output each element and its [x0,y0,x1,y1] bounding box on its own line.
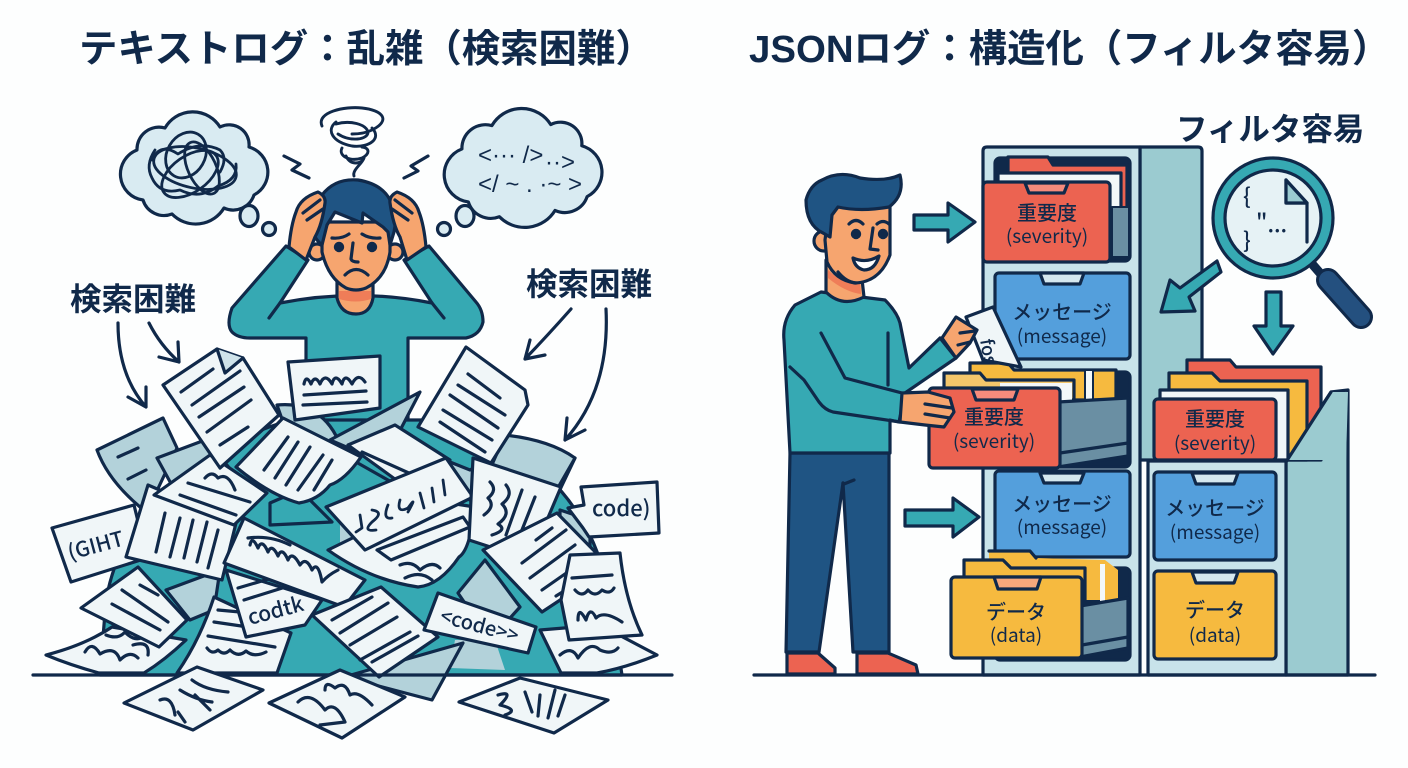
icon: magnifying glass with JSON: "... [1256,207,1287,239]
paper: scribble [154,455,267,525]
panel: text logs [33,28,672,738]
thought cloud: garbled code: ··> [545,149,575,176]
paper in hand: fos [974,337,1004,366]
paper: floor sheet A [124,667,263,730]
paper pile: codtk [244,588,307,632]
paper: wiggly columns [469,458,561,560]
filtered folder box: 重要度 [1185,408,1245,431]
paper: curled lines [236,418,361,503]
stressed person [229,180,483,440]
paper: vertical lines [126,485,236,580]
fourth drawer: message: メッセージ [1012,494,1112,516]
thought cloud: garbled code: <··· /> [478,142,543,169]
icon: magnifying glass with JSON: } [1243,223,1251,255]
arrow: diagonal to cabinet [1161,261,1221,312]
paper: lower right wiggly [561,553,642,640]
paper pile: <code>> [437,600,522,649]
fourth drawer: message: (message) [1017,513,1107,540]
filtered folder box: (severity) [1174,429,1256,456]
arrow: down to folder box [1254,292,1293,354]
paper: GIHT [52,505,147,582]
paper: code) [568,482,659,537]
second drawer: message [995,273,1130,359]
label: hard to search, left: 検索困難 [70,281,196,317]
open drawer with severity folder [929,363,1130,468]
ground line [754,673,1375,677]
panel: JSON logs [749,28,1390,675]
paper pile [33,347,672,738]
top drawer with severity folder [983,157,1130,262]
filtered folder box: (data) [1189,621,1241,648]
icon: stress zigzags [284,156,428,178]
ground line [33,673,672,677]
paper pile: (GIHT [64,523,127,567]
filtered folder box: データ [1185,598,1245,622]
neck [826,260,864,301]
paper: wiggly text, bottom left [46,627,186,673]
open drawer with severity folder: (severity) [953,427,1035,454]
paper: top right [418,347,528,463]
pants [786,453,889,652]
paper: wiggly line [224,518,365,607]
paper in hand [966,307,1021,367]
arrow: to lower drawer [905,498,979,537]
paper: ueeer [177,597,291,673]
open drawer: data: データ [986,600,1046,624]
happy person filing [784,174,1021,674]
top drawer with severity folder: 重要度 [1017,202,1077,225]
filtered folder box: (message) [1170,518,1260,545]
paper: center lines [312,587,438,677]
arrows pointing at the pile [118,309,606,440]
paper pile: code) [592,491,650,523]
open drawer with severity folder: 重要度 [964,406,1024,429]
sweater [784,292,956,453]
paper: left lines [81,567,187,647]
second drawer: message: (message) [1017,322,1107,349]
second drawer: message: メッセージ [1012,302,1112,324]
lower hand [900,392,954,427]
paper: floor sheet C [459,678,608,733]
arrow: to top drawer [914,203,975,242]
paper: bottom right wiggly [540,625,657,673]
paper: big top left [163,349,279,468]
label: easy to filter: フィルタ容易 [1176,111,1364,147]
icon: confusion spiral [321,108,383,176]
open drawer: data: (data) [990,621,1042,648]
thought cloud: tangled scribble [120,112,276,236]
filtered folder box [1148,360,1348,675]
paper: cursive [326,458,473,550]
fourth drawer: message [995,471,1130,557]
paper: right lines [483,513,610,612]
upper hand [942,317,977,358]
paper: code snippet [226,570,322,637]
heading: JSON log: JSONログ：構造化（フィルタ容易） [749,28,1390,71]
label: hard to search, right: 検索困難 [526,266,652,302]
filing cabinet [929,147,1202,675]
head [814,231,834,251]
thought cloud: garbled code: </ ~ . ·~ > [478,171,582,198]
filtered folder box: メッセージ [1165,498,1265,520]
paper: strip under cursive [377,517,470,560]
paper: crumpled scribble [328,500,475,587]
icon: magnifying glass with JSON: { [1243,179,1251,211]
paper: code tag [424,593,536,653]
heading: text log: テキストログ：乱雑（検索困難） [79,28,654,71]
icon: magnifying glass with JSON [1213,158,1361,317]
thought cloud: garbled code [438,108,602,236]
top drawer with severity folder: (severity) [1006,222,1088,249]
paper: wallee [288,356,380,420]
paper: floor sheet B [269,670,405,738]
open drawer: data [951,551,1130,660]
shoes [787,653,835,674]
